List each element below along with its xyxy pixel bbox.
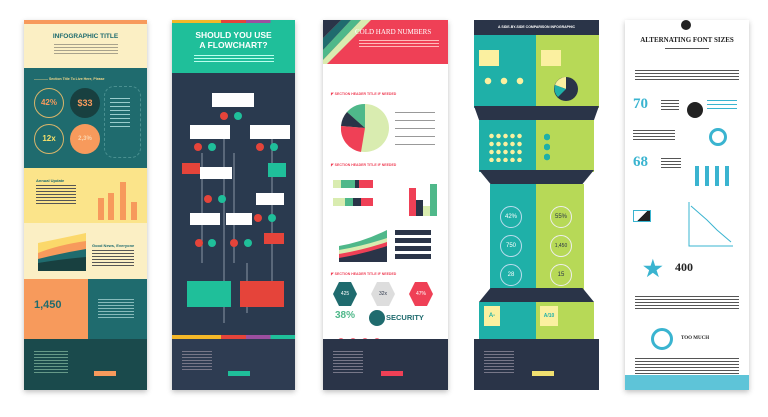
panel 3: cold hard numbers: SECURITY <box>386 313 424 322</box>
panel 5: alternating font sizes: TOO MUCH <box>681 336 709 341</box>
stat circles <box>500 206 522 228</box>
footer <box>323 339 448 390</box>
middle section 2 <box>490 184 536 290</box>
area chart section: Good News, Everyone <box>92 243 134 248</box>
panel 5: alternating font sizes: 400 <box>675 260 693 274</box>
panel 4: side by side comparison <box>474 20 599 390</box>
bar chart section <box>24 168 147 223</box>
top section <box>474 20 536 108</box>
navy fold band 2 <box>479 170 594 184</box>
navy fold band 3 <box>479 288 594 302</box>
bar charts <box>333 180 373 188</box>
pie chart <box>341 104 389 152</box>
panel 3: cold hard numbers <box>323 20 448 390</box>
footer <box>24 339 147 390</box>
panel 3: cold hard numbers: 32x <box>379 291 387 297</box>
flowchart <box>182 93 290 323</box>
stat circles section <box>24 68 147 168</box>
header: COLD HARD NUMBERS <box>355 28 431 36</box>
panel 3: cold hard numbers: ◤ SECTION HEADER TITLE IF NEEDED <box>331 92 396 96</box>
panel 2: flowchart <box>172 20 295 390</box>
panel 4: side by side comparison: 28 <box>508 272 514 278</box>
panel 5: alternating font sizes <box>625 20 749 390</box>
stat circles section: ———— Section Title To Live Here, Please <box>34 77 104 81</box>
stat circles section: 2,3% <box>78 136 92 142</box>
1,450 block <box>24 279 88 339</box>
panel 3: cold hard numbers: ◤ SECTION HEADER TITLE IF NEEDED <box>331 272 396 276</box>
hexagons: 425 <box>341 291 349 297</box>
stat circles section: $33 <box>77 98 93 108</box>
1,450 block: 1,450 <box>34 299 62 311</box>
panel 4: side by side comparison: 55% <box>555 214 567 220</box>
navy fold band 1 <box>474 106 599 120</box>
panel 4: side by side comparison: 15 <box>558 272 564 278</box>
title: INFOGRAPHIC TITLE <box>53 33 118 40</box>
middle section 1 <box>479 120 536 172</box>
panel 1: infographic title <box>24 20 147 390</box>
panel 5: alternating font sizes: 68 <box>633 154 648 170</box>
area chart section <box>24 223 147 279</box>
title: ALTERNATING FONT SIZES <box>640 36 734 44</box>
header bar: A SIDE-BY-SIDE COMPARISON INFOGRAPHIC <box>498 25 575 29</box>
panel 5: alternating font sizes: ★ <box>643 256 663 281</box>
panel 4: side by side comparison: A- <box>489 313 495 319</box>
panel 3: cold hard numbers: 38% <box>335 310 355 321</box>
header bar <box>474 20 599 35</box>
footer <box>625 375 749 390</box>
hexagons <box>333 282 357 306</box>
panel 3: cold hard numbers: ◤ SECTION HEADER TITLE IF NEEDED <box>331 163 396 167</box>
footer <box>172 339 295 390</box>
stat circles: 42% <box>505 214 517 220</box>
bottom section <box>479 302 536 340</box>
panel 3: cold hard numbers: 47% <box>416 291 426 297</box>
stat circles section: 42% <box>41 98 57 107</box>
stat circles section: 12x <box>42 134 56 143</box>
bar chart section: Annual Update <box>36 178 64 183</box>
panel 5: alternating font sizes: 70 <box>633 96 648 112</box>
title: SHOULD YOU USE <box>195 30 272 40</box>
header <box>323 20 448 64</box>
panel 4: side by side comparison: 750 <box>506 243 516 249</box>
footer <box>474 339 599 390</box>
title <box>172 23 295 73</box>
panel 4: side by side comparison: A/10 <box>544 313 554 319</box>
panel 4: side by side comparison: 1,450 <box>555 243 567 249</box>
title: A FLOWCHART? <box>199 40 268 50</box>
